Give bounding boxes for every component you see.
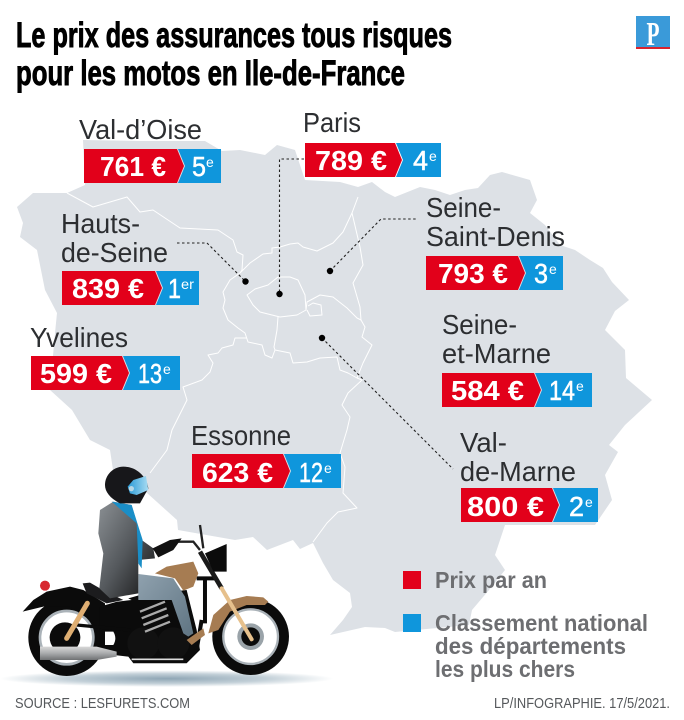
frame gaps [105, 598, 132, 645]
panel: Val-de-Marne [460, 427, 598, 522]
leader line: Val-de-Marne [319, 335, 453, 469]
panel: Seine-Saint-Denis: e [549, 261, 557, 277]
rear fender [23, 587, 105, 647]
front fender [208, 596, 268, 633]
panel: Val-d'Oise: 5 [192, 151, 206, 182]
panel: Seine-et-Marne: 14 [549, 375, 575, 406]
panel: Hauts-de-Seine: 1 [168, 273, 181, 304]
panel: Val-d'Oise: Val-d’Oise [79, 114, 202, 145]
ground shadow [0, 670, 333, 687]
jacket [98, 502, 155, 598]
title: pour les motos en Ile-de-France [16, 54, 405, 93]
visor [128, 476, 148, 495]
rear strut [67, 603, 87, 638]
panel: Yvelines [30, 322, 180, 390]
legend [403, 567, 648, 682]
panel: Val-d'Oise [79, 114, 221, 183]
map: Ile-de-France departments [17, 140, 652, 635]
panel: Seine-Saint-Denis: Seine- [426, 192, 501, 223]
title: Le prix des assurances tous risques [16, 16, 452, 55]
front wheel [212, 598, 289, 675]
panel: Seine-Saint-Denis [426, 192, 565, 290]
panel: Seine-et-Marne: 584 € [451, 375, 524, 406]
panel: Hauts-de-Seine: Hauts- [61, 208, 140, 239]
visor hinge [129, 486, 134, 491]
panel: Seine-et-Marne: Seine- [442, 309, 517, 340]
panel: Paris: 789 € [315, 145, 387, 176]
scarf [112, 502, 143, 568]
panel: Seine-Saint-Denis: 793 € [438, 258, 508, 289]
helmet [105, 467, 148, 503]
icon: motorcycle with rider [0, 467, 333, 687]
fuel tank [155, 562, 198, 591]
panel: Paris: 4 [413, 145, 428, 176]
panel: Yvelines: Yvelines [30, 322, 128, 353]
panel: Yvelines: 599 € [40, 358, 112, 389]
panel: Hauts-de-Seine: de-Seine [61, 237, 168, 268]
engine cylinders [127, 602, 189, 659]
panel: Essonne [191, 420, 341, 488]
department borders [67, 193, 372, 542]
boot [187, 628, 205, 645]
panel: Seine-et-Marne: et-Marne [442, 338, 551, 369]
panel: Yvelines: e [163, 361, 171, 377]
engine block and frame [100, 590, 200, 663]
panel: Val-d'Oise: e [206, 154, 214, 170]
panel: Hauts-de-Seine: er [181, 276, 194, 292]
frame down tube [197, 578, 217, 650]
handlebar and mirror [170, 525, 203, 550]
source: SOURCE : LESFURETS.COM [15, 695, 190, 712]
panel: Val-d'Oise: 761 € [100, 151, 166, 182]
panel: Val-de-Marne: 800 € [467, 491, 544, 522]
title [16, 16, 452, 93]
leader line: Seine-Saint-Denis [327, 219, 416, 274]
seat [83, 583, 123, 603]
panel: Hauts-de-Seine [61, 208, 199, 305]
leader line: Paris [276, 159, 304, 297]
frame bar [77, 625, 130, 630]
legend: classement national: des départements [435, 633, 626, 659]
logo: Le Parisien: P [646, 16, 660, 53]
panel: Val-de-Marne: 2 [569, 491, 584, 522]
panel: Val-de-Marne: e [585, 494, 593, 510]
panel: Hauts-de-Seine: 839 € [72, 273, 144, 304]
logo: Le Parisien [636, 16, 670, 53]
leg [138, 574, 193, 637]
panel: Essonne: 623 € [202, 457, 273, 488]
leader line: Hauts-de-Seine [177, 243, 249, 285]
panel: Essonne: 12 [299, 457, 323, 488]
panel: Paris [303, 107, 441, 177]
legend: classement national [403, 610, 648, 682]
rear light [40, 581, 50, 591]
panel: Seine-et-Marne: e [576, 378, 584, 394]
legend: classement national: Classement national [435, 610, 648, 636]
rear wheel [28, 599, 105, 676]
panel: Paris: e [429, 148, 437, 164]
panel: Val-de-Marne: de-Marne [460, 456, 576, 487]
panel: Essonne: Essonne [191, 420, 291, 451]
legend: prix par an: Prix par an [435, 567, 547, 593]
map outline [17, 140, 652, 635]
panel: Essonne: e [324, 460, 332, 476]
panel: Val-de-Marne: Val- [460, 427, 507, 458]
panel: Paris: Paris [303, 107, 361, 138]
panel: Yvelines: 13 [138, 358, 162, 389]
panel: Seine-et-Marne [442, 309, 592, 407]
panel: Seine-Saint-Denis: Saint-Denis [426, 221, 565, 252]
panel: Seine-Saint-Denis: 3 [534, 258, 548, 289]
legend: classement national: les plus chers [435, 656, 575, 682]
exhaust [40, 647, 117, 660]
glove [153, 538, 182, 557]
headlight [205, 544, 227, 572]
front fork [200, 552, 252, 639]
